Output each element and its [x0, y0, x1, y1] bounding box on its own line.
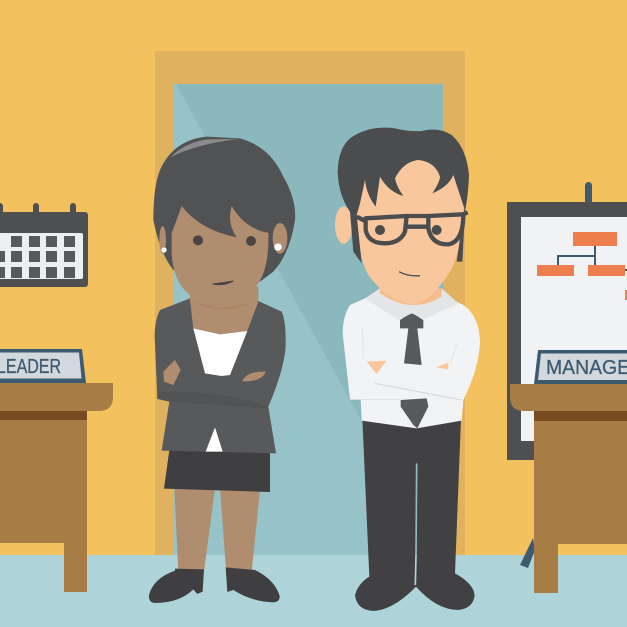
man head [335, 128, 469, 320]
fringe [172, 170, 273, 237]
right desk [510, 384, 627, 593]
flip chart tripod leg [520, 538, 535, 568]
hair highlight [160, 139, 238, 170]
nameplate: manager [534, 350, 627, 384]
eyes [375, 225, 385, 235]
neck [190, 287, 258, 333]
woman head [153, 137, 295, 333]
character: man manager [335, 128, 480, 611]
mouth [399, 272, 420, 276]
character: woman leader [149, 137, 295, 603]
doorway [155, 51, 465, 555]
chin shadow [193, 302, 255, 309]
hair [338, 128, 469, 263]
tie [400, 313, 428, 428]
left desk [0, 383, 113, 592]
floor [0, 555, 627, 627]
shoes [149, 567, 280, 603]
skirt [164, 450, 270, 492]
icon: wall calendar [0, 203, 88, 287]
hair back [153, 137, 295, 282]
upper chest skin [190, 295, 258, 334]
white top [193, 328, 247, 376]
man body [343, 297, 480, 611]
neck and collar [365, 288, 458, 320]
hands [367, 361, 448, 374]
nameplate: leader [0, 349, 86, 383]
earrings [274, 243, 282, 251]
glasses [357, 212, 468, 244]
gap between legs [415, 463, 417, 585]
ear [335, 206, 352, 244]
legs [174, 488, 260, 572]
face [172, 206, 268, 308]
woman lower body and jacket [149, 295, 286, 603]
ears [273, 223, 287, 254]
shirt creases [350, 327, 462, 400]
eyes [193, 235, 203, 245]
hands [163, 360, 266, 385]
flip chart board [507, 182, 627, 460]
org chart [537, 232, 627, 300]
trousers and shoes [355, 418, 475, 611]
jacket [155, 298, 286, 453]
face [357, 158, 465, 304]
mouth [213, 281, 233, 285]
shirt [343, 297, 480, 428]
